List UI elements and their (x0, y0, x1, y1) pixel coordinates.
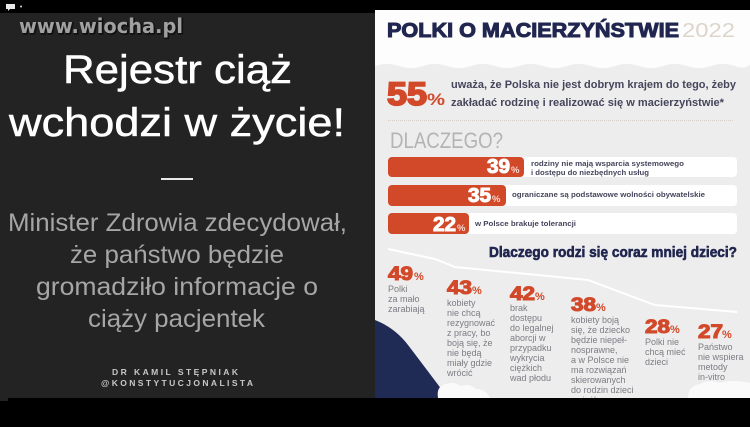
bar: 39 percent: 39 (487, 156, 510, 178)
stat: 43 percent: nie chcą (447, 308, 481, 318)
stat: 43 percent: rezygnować (447, 318, 496, 328)
stat: 27 percent: 27 (698, 322, 723, 343)
stat: 43 percent (446, 278, 496, 378)
stat: 43 percent: z pracy, bo (447, 328, 490, 338)
body text (8, 209, 347, 333)
panel: right infographic (375, 10, 750, 405)
bar: 35 percent (388, 185, 737, 207)
bar: 35 percent: 35 (468, 185, 491, 207)
stat: 38 percent (571, 295, 634, 405)
stat: 49 percent: zarabiają (388, 304, 425, 314)
stat: 27 percent: Państwo (698, 342, 733, 352)
panel: left dark quote card (0, 4, 375, 401)
stat: 55 percent (387, 76, 737, 112)
watermark: www.wiocha.pl (19, 14, 183, 38)
stat: 49 percent: 49 (388, 264, 413, 285)
stat: 55 percent: uważa, że Polska nie jest dobrym krajem do tego, żeby (451, 79, 737, 91)
title: Rejestr ciąż: wchodzi w życie! (8, 101, 345, 145)
bar: 22 percent: 22 (433, 214, 456, 236)
stat: 55 percent: % (427, 90, 445, 109)
stat: 43 percent: nie będą (447, 348, 482, 358)
stat: 38 percent: nosprawne, (571, 345, 618, 355)
body text: gromadziło informacje o (36, 273, 318, 301)
stat: 49 percent: za mało (388, 294, 420, 304)
bar: 35 percent: % (492, 194, 501, 205)
stat: 43 percent: kobiety (447, 298, 476, 308)
bar: 22 percent (388, 213, 737, 236)
icon: top-left chat bubble (6, 4, 22, 11)
stat: 38 percent: się, że dziecko (571, 325, 630, 335)
stat: 42 percent: brak (510, 303, 528, 313)
stat: 42 percent: przypadku (510, 343, 552, 353)
stat: 38 percent: ma rozwiązań (571, 365, 627, 375)
stat: 28 percent: % (670, 324, 680, 336)
stat: 42 percent: wad płodu (509, 373, 551, 383)
author credit: @KONSTYTUCJONALISTA (101, 378, 253, 388)
title: Rejestr ciąż: Rejestr ciąż (63, 48, 292, 92)
stat: 38 percent: z ciężką (571, 395, 604, 405)
title: Polki o macierzyństwie 2022: POLKI O MACIERZYŃSTWIE (387, 19, 679, 42)
stat: 43 percent: 43 (447, 278, 472, 299)
stat: 38 percent: będzie niepeł- (571, 335, 627, 345)
decorative navy hill (375, 320, 448, 398)
declining white trend line (388, 249, 737, 312)
bar: 39 percent (388, 156, 737, 178)
stat: 42 percent (509, 284, 554, 383)
bar: 35 percent: ograniczane są podstawowe wolności obywatelskie (512, 190, 705, 199)
heading: Dlaczego?: DLACZEGO? (390, 128, 503, 153)
stat: 28 percent: chcą mieć (645, 347, 686, 357)
stat: 42 percent: 42 (510, 284, 535, 305)
stat: 38 percent: 38 (571, 295, 596, 316)
body text: Minister Zdrowia zdecydował, (8, 209, 347, 237)
stat: 43 percent: miały gdzie (447, 358, 492, 368)
stat: 49 percent: % (414, 271, 424, 283)
stat: 49 percent: Polki (388, 284, 408, 294)
stat: 38 percent: do rodzin dzieci (571, 385, 634, 395)
stat: 27 percent: % (722, 329, 732, 341)
bar: 39 percent: rodziny nie mają wsparcia systemowego (531, 159, 684, 168)
stat: 28 percent: dzieci (645, 357, 668, 367)
stat: 38 percent: kobiety boją (571, 315, 619, 325)
stat: 42 percent: do legalnej (510, 323, 554, 333)
stat: 42 percent: dostępu (510, 313, 542, 323)
stat: 42 percent: % (535, 291, 545, 303)
stat: 42 percent: wykrycia (509, 353, 545, 363)
author credit: DR KAMIL STĘPNIAK (112, 367, 239, 377)
stat: 43 percent: % (472, 285, 482, 297)
watermark: www.wiocha.pl (20, 15, 184, 39)
stat: 28 percent: 28 (645, 317, 670, 338)
stat: 27 percent: nie wspiera (698, 352, 744, 362)
stat: 55 percent: 55 (387, 76, 427, 112)
stat: 27 percent: in-vitro (698, 372, 725, 382)
stat: 42 percent: aborcji w (510, 333, 546, 343)
divider dash (161, 178, 193, 180)
stat: 28 percent (645, 317, 686, 367)
bar: 22 percent: % (457, 223, 466, 234)
stat: 49 percent (388, 264, 425, 314)
stat: 43 percent: boją się, że (447, 338, 493, 348)
bar: 39 percent: % (511, 165, 520, 176)
body text: że państwo będzie (70, 241, 284, 269)
stat: 38 percent: a w Polsce nie (571, 355, 629, 365)
title: Rejestr ciąż (8, 48, 345, 145)
title: Polki o macierzyństwie 2022: 2022 (682, 20, 735, 42)
stat: 38 percent: skierowanych (571, 375, 626, 385)
stat: 42 percent: ciężkich (510, 363, 542, 373)
stat: 43 percent: wrócić (446, 368, 473, 378)
stat: 28 percent: Polki nie (645, 337, 679, 347)
stat: 27 percent (698, 322, 744, 382)
stat: 27 percent: metody (698, 362, 728, 372)
stat: 38 percent: % (596, 302, 606, 314)
author credit (101, 367, 253, 388)
bar: 22 percent: w Polsce brakuje tolerancji (474, 219, 576, 228)
clouds (438, 381, 750, 398)
stat: 55 percent: zakładać rodzinę i realizować się w macierzyństwie* (451, 97, 725, 109)
bar: 39 percent: i dostępu do niezbędnych usług (531, 168, 649, 177)
body text: ciąży pacjentek (88, 305, 266, 333)
